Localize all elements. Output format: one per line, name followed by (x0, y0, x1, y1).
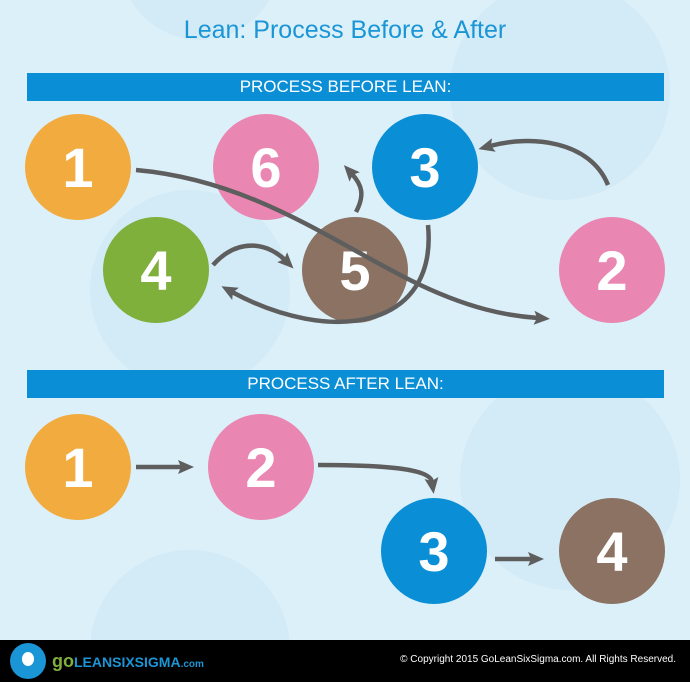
diagram: 2 (245, 436, 277, 499)
heading bar: after: PROCESS AFTER LEAN: (247, 374, 444, 393)
circles after (25, 414, 131, 520)
diagram: 3 (418, 520, 450, 583)
diagram: 2 (596, 239, 628, 302)
heading bar: after (27, 370, 664, 398)
diagram: 3 (409, 136, 441, 199)
footer (0, 640, 690, 682)
circles after: 1 (62, 436, 94, 499)
heading bar: before: PROCESS BEFORE LEAN: (240, 77, 451, 96)
title: Lean: Process Before & After (184, 16, 506, 44)
diagram: 4 (140, 239, 172, 302)
circles before: 1 (62, 136, 94, 199)
logo text: goLEANSIXSIGMA.com (52, 651, 204, 671)
diagram: 5 (339, 239, 371, 302)
arrows after (136, 465, 532, 559)
heading bar: before (27, 73, 664, 101)
arrows before (136, 141, 608, 322)
diagram: 4 (596, 520, 628, 583)
logo icon (10, 643, 46, 679)
diagram: 6 (250, 136, 282, 199)
copyright: © Copyright 2015 GoLeanSixSigma.com. All Rights Reserved. (400, 654, 676, 665)
circles before (25, 114, 131, 220)
